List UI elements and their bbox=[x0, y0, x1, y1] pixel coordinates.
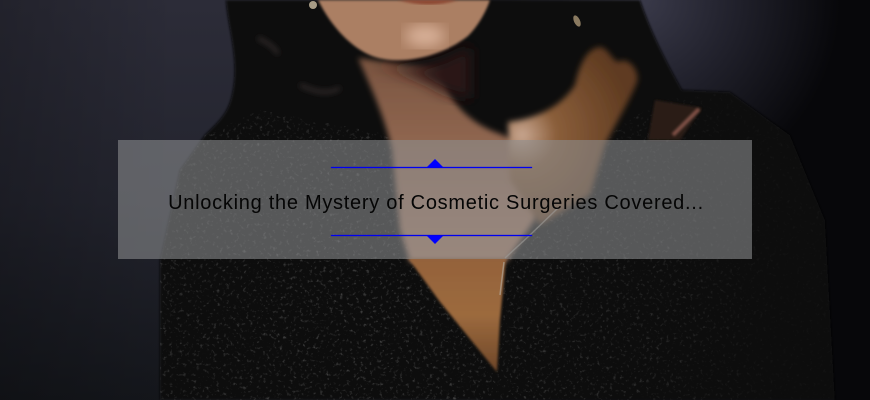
top diamond ornament bbox=[427, 159, 443, 167]
ring bbox=[572, 14, 582, 28]
top divider rule bbox=[331, 167, 532, 168]
hair highlights bbox=[258, 38, 340, 92]
title: Unlocking the Mystery of Cosmetic Surgeries Covered... bbox=[168, 192, 704, 214]
bottom divider rule bbox=[331, 235, 532, 236]
chest V bbox=[408, 258, 506, 372]
lips bbox=[398, 0, 458, 4]
sweater fur bbox=[160, 111, 772, 400]
collar edge bbox=[673, 109, 699, 135]
collar lining bbox=[648, 100, 702, 140]
earring bbox=[309, 1, 317, 9]
chin highlight bbox=[405, 25, 445, 47]
necklace bbox=[500, 208, 558, 295]
translucent title panel bbox=[118, 140, 752, 259]
hand bbox=[508, 47, 637, 225]
face bbox=[318, 0, 490, 60]
bottom diamond ornament bbox=[427, 236, 443, 244]
right wall bbox=[480, 0, 870, 400]
neck bbox=[358, 58, 540, 262]
hair and sweater silhouette bbox=[160, 0, 835, 400]
chin shadow bbox=[365, 45, 470, 100]
